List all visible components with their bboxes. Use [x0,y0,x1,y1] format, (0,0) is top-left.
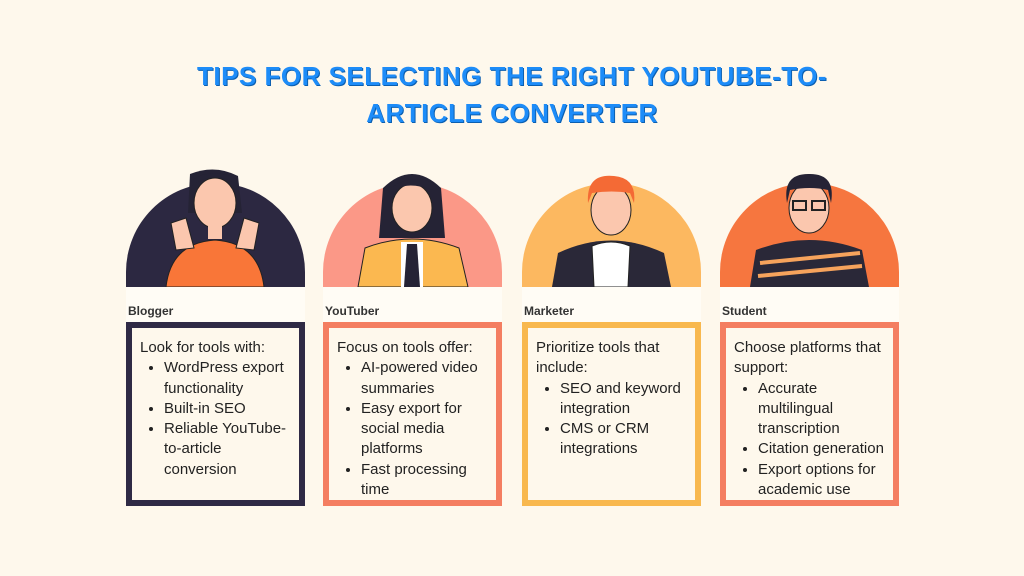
text box: marketer: Prioritize tools that include: [536,339,659,376]
label: student [720,287,899,322]
title [197,61,827,128]
text box: blogger [126,322,305,506]
title: TIPS FOR SELECTING THE RIGHT YOUTUBE-TO- [197,61,827,91]
text box: marketer: SEO and keyword integration [560,380,681,417]
text box: youtuber [323,322,502,506]
panel: marketer [522,176,701,506]
label: marketer [522,287,701,322]
illustration: youtuber [358,174,468,287]
arch: student [720,183,899,287]
text box: marketer [522,322,701,506]
text box: student [720,322,899,506]
arch: youtuber [323,183,502,287]
label: blogger: Blogger [128,304,173,318]
text box: blogger: Look for tools with: [140,339,265,356]
panel: blogger [126,170,305,506]
arch: blogger [126,183,305,287]
label: blogger [126,287,305,322]
label: youtuber: YouTuber [325,304,379,318]
text box: youtuber: Easy export for social media platforms [361,400,462,457]
text box: blogger: WordPress export functionality [164,359,284,397]
text box: youtuber: AI-powered video summaries [361,359,478,397]
text box: student: Citation generation [758,440,884,457]
title: ARTICLE CONVERTER [366,98,658,128]
panel: youtuber [323,174,502,506]
label: youtuber [323,287,502,322]
text box: marketer: CMS or CRM integrations [560,420,649,457]
illustration: student [750,174,869,287]
text box: student: Accurate multilingual transcription [758,380,840,437]
illustration: marketer [552,176,671,287]
text box: youtuber: Fast processing time [361,461,467,498]
text box: student: Choose platforms that support: [734,339,881,376]
text box: blogger: Built-in SEO [164,400,246,417]
text box: blogger: Reliable YouTube-to-article conversion [164,420,286,478]
label: marketer: Marketer [524,304,574,318]
illustration: blogger [166,170,264,287]
arch: marketer [522,183,701,287]
label: student: Student [722,304,767,318]
text box: student: Export options for academic use [758,461,876,498]
panel: student [720,174,899,506]
text box: youtuber: Focus on tools offer: [337,339,473,356]
